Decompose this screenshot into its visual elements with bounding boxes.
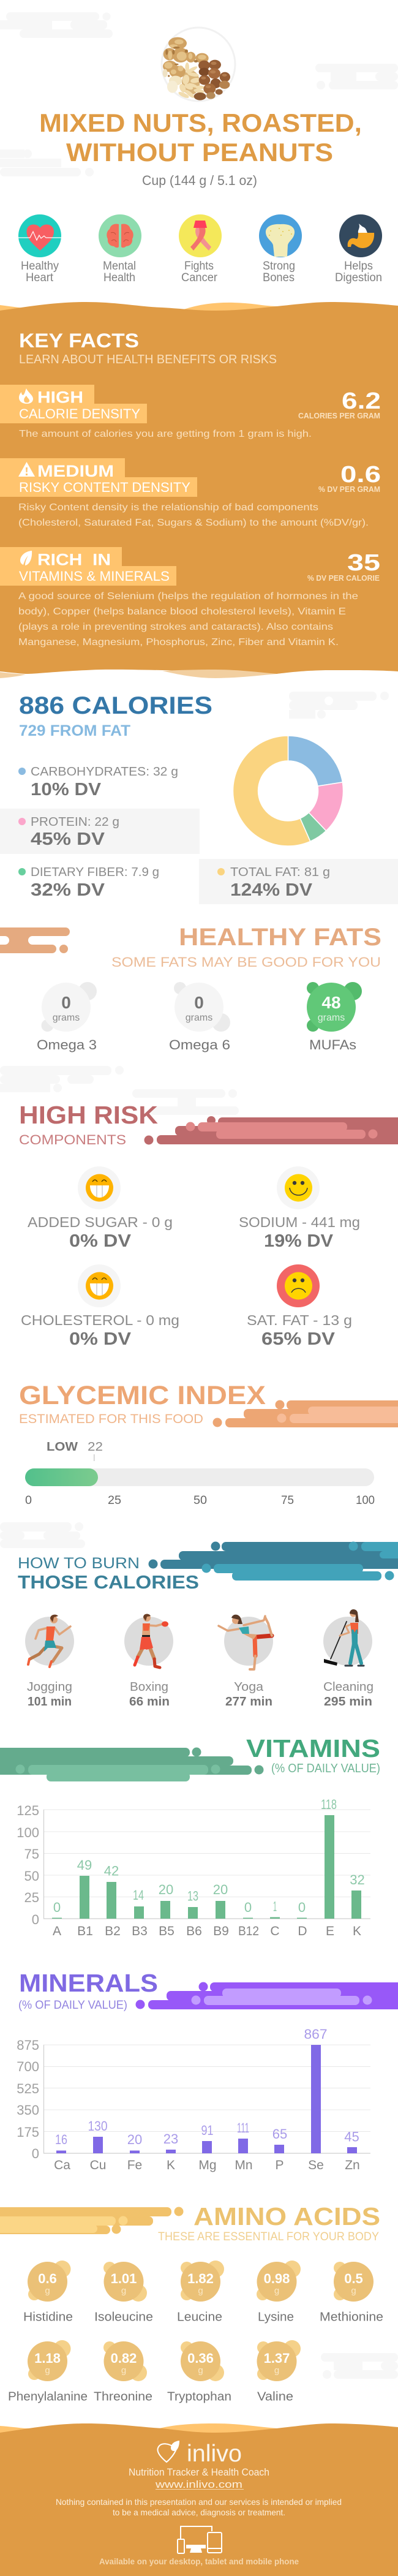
- activity: boxing: [124, 1614, 173, 1709]
- icon: devices: [178, 2526, 222, 2553]
- bar chart: minerals: 45: [344, 2129, 359, 2144]
- amino acid: leucine: g: [198, 2286, 203, 2296]
- heading: how to burn: THOSE CALORIES: [18, 1571, 199, 1593]
- bar chart: vitamins: 20: [213, 1882, 228, 1897]
- icon: fights cancer: Cancer: [181, 271, 218, 284]
- icon: flame: [19, 388, 33, 404]
- bar chart: minerals: 867: [304, 2026, 327, 2042]
- title: WITHOUT PEANUTS: [66, 138, 333, 167]
- amino acid: methionine: g: [351, 2286, 356, 2296]
- banner: amino acids: [0, 2207, 184, 2234]
- bar chart: vitamins: 1: [273, 1899, 277, 1914]
- fact: high calorie density: [0, 385, 381, 439]
- heading: calories: 729 FROM FAT: [19, 722, 130, 739]
- bar chart: minerals: 130: [88, 2118, 108, 2134]
- logo: inlivo: [157, 2441, 242, 2467]
- bar chart: vitamins: 20: [159, 1882, 173, 1897]
- fact: high calorie density: CALORIE DENSITY: [19, 406, 140, 421]
- banner: high risk: [145, 1116, 398, 1144]
- legend: dietary fiber: [18, 866, 159, 900]
- logo: inlivo: inlivo: [187, 2441, 242, 2467]
- bar chart: minerals: 23: [163, 2131, 178, 2147]
- bar chart: vitamins: E: [326, 1924, 334, 1938]
- fact: rich in vitamins and minerals: % DV PER CALORIE: [307, 574, 380, 583]
- bar chart: minerals: 0: [32, 2146, 39, 2161]
- amino acid: histidine: g: [45, 2286, 50, 2296]
- legend: dietary fiber: 32% DV: [31, 880, 105, 900]
- stat: MUFAs: MUFAs: [309, 1037, 356, 1052]
- risk: cholesterol: 0% DV: [69, 1329, 132, 1349]
- amino acid: valine: 1.37: [264, 2351, 290, 2366]
- amino acid: isoleucine: 1.01: [111, 2271, 137, 2286]
- amino acid: tryptophan: 0.36: [187, 2351, 214, 2366]
- amino acid: histidine: Histidine: [23, 2311, 73, 2324]
- bar chart: vitamins: B12: [238, 1924, 259, 1938]
- gauge: glycemic index: 22: [88, 1440, 103, 1454]
- bar chart: vitamins: 50: [24, 1868, 39, 1884]
- bar chart: minerals: Mg: [198, 2158, 217, 2172]
- bar chart: vitamins: B3: [132, 1924, 148, 1938]
- amino acid: lysine: Lysine: [258, 2311, 294, 2324]
- stat: MUFAs: grams: [318, 1013, 345, 1023]
- amino acid: lysine: 0.98: [264, 2271, 290, 2286]
- icon: strong bones: Strong: [263, 260, 295, 273]
- bar chart: minerals: 350: [17, 2102, 39, 2118]
- bar chart: vitamins: B5: [159, 1924, 175, 1938]
- footer: to be a medical advice, diagnosis or treatment.: [113, 2507, 285, 2517]
- heading: key facts: KEY FACTS: [19, 330, 139, 352]
- heading: calories: 886 CALORIES: [19, 692, 212, 719]
- bar chart: vitamins: 118: [321, 1797, 337, 1812]
- bar chart: vitamins: D: [298, 1924, 307, 1938]
- fact: rich in vitamins and minerals: [0, 547, 380, 648]
- bar chart: vitamins: 25: [24, 1890, 39, 1905]
- legend: protein: PROTEIN: 22 g: [31, 815, 119, 829]
- bar chart: vitamins: A: [53, 1924, 61, 1938]
- amino acid: tryptophan: Tryptophan: [167, 2390, 231, 2404]
- icon: heart and leaf: [157, 2441, 179, 2462]
- legend: total fat: [217, 866, 330, 900]
- icon: strong bones: [259, 214, 302, 284]
- bar chart: minerals: 16: [55, 2132, 67, 2147]
- amino acid: phenylalanine: [8, 2340, 88, 2404]
- risk: saturated fat: SAT. FAT - 13 g: [247, 1312, 352, 1328]
- bar chart: minerals: P: [275, 2158, 284, 2172]
- heading: minerals: [18, 1969, 158, 2012]
- activity: boxing: Boxing: [130, 1680, 168, 1694]
- heading: high risk: [19, 1101, 158, 1147]
- fact: high calorie density: CALORIES PER GRAM: [298, 412, 380, 420]
- bar chart: vitamins: B9: [213, 1924, 229, 1938]
- activity: jogging: [25, 1615, 74, 1709]
- footer: Available on your desktop, tablet and mobile phone: [99, 2556, 299, 2566]
- banner: burn calories: [148, 1541, 398, 1581]
- icon: helps digestion: Digestion: [335, 271, 382, 284]
- bar chart: minerals: 91: [201, 2123, 213, 2138]
- amino acid: methionine: [320, 2262, 383, 2324]
- serving size: Cup (144 g / 5.1 oz): [142, 173, 257, 188]
- fact: medium risky content density: Risky Content density is the relationship of bad components: [18, 502, 318, 513]
- stat: omega 6: [169, 982, 230, 1052]
- fact: medium risky content density: (Cholesterol, Saturated Fat, Sugars & Sodium) to the amount (%DV/gr).: [18, 518, 369, 528]
- bar chart: vitamins: [17, 1797, 370, 1938]
- icon: yoga figure: [219, 1615, 272, 1669]
- bar chart: minerals: 700: [17, 2059, 39, 2074]
- icon: helps digestion: [335, 214, 382, 284]
- bar chart: vitamins: C: [270, 1924, 280, 1938]
- amino acid: lysine: [257, 2261, 301, 2324]
- icon: leaf: [20, 551, 32, 565]
- icon: runner: [28, 1615, 70, 1667]
- legend: dietary fiber: DIETARY FIBER: 7.9 g: [31, 866, 159, 879]
- bar chart: vitamins: 0: [32, 1912, 39, 1927]
- bar chart: vitamins: 125: [17, 1803, 39, 1818]
- gauge: glycemic index: 0: [25, 1494, 32, 1507]
- bar chart: minerals: Ca: [54, 2158, 70, 2172]
- legend: protein: 45% DV: [31, 829, 105, 849]
- legend: carbohydrates: CARBOHYDRATES: 32 g: [31, 765, 178, 779]
- banner: glycemic index: [213, 1400, 398, 1427]
- heading: glycemic index: GLYCEMIC INDEX: [19, 1381, 266, 1410]
- icon: healthy heart: [18, 214, 61, 284]
- bar chart: vitamins: B1: [77, 1924, 93, 1938]
- activity: yoga: [219, 1615, 273, 1709]
- amino acid: isoleucine: [94, 2262, 153, 2324]
- amino acid: histidine: [23, 2261, 73, 2324]
- amino acid: tryptophan: g: [198, 2365, 203, 2376]
- title: [39, 108, 362, 167]
- heading: healthy fats: [111, 924, 381, 970]
- amino acid: leucine: 1.82: [187, 2271, 214, 2286]
- icon: strong bones: Bones: [263, 271, 295, 284]
- heading: high risk: COMPONENTS: [19, 1132, 126, 1147]
- footer: Nothing contained in this presentation and our services is intended or implied: [56, 2497, 342, 2507]
- gauge: glycemic index: 25: [108, 1494, 121, 1507]
- fact: medium risky content density: RISKY CONTENT DENSITY: [19, 480, 190, 495]
- amino acid: leucine: Leucine: [177, 2311, 222, 2324]
- bar chart: minerals: Zn: [345, 2158, 360, 2172]
- gauge: glycemic index: [25, 1440, 375, 1507]
- bar chart: vitamins: 0: [53, 1900, 61, 1915]
- fact: rich in vitamins and minerals: RICH IN: [37, 550, 111, 568]
- risk: cholesterol: CHOLESTEROL - 0 mg: [21, 1312, 179, 1328]
- risk: cholesterol: [21, 1264, 179, 1349]
- heading: amino acids: THESE ARE ESSENTIAL FOR YOUR BODY: [158, 2230, 379, 2243]
- heading: vitamins: VITAMINS: [246, 1734, 380, 1762]
- bar chart: minerals: Cu: [90, 2158, 106, 2172]
- bar chart: vitamins: 13: [187, 1888, 198, 1904]
- bar chart: minerals: 65: [272, 2126, 287, 2142]
- amino acid: histidine: 0.6: [38, 2271, 57, 2286]
- risk: added sugar: [28, 1166, 173, 1251]
- bar chart: minerals: 20: [127, 2132, 142, 2147]
- banner: vitamins: [0, 1747, 263, 1781]
- amino acid: lysine: g: [274, 2286, 279, 2296]
- bar chart: minerals: Fe: [127, 2158, 142, 2172]
- heading: how to burn: [18, 1555, 199, 1593]
- bar chart: vitamins: 100: [17, 1825, 39, 1840]
- bar chart: minerals: Se: [308, 2158, 324, 2172]
- heading: healthy fats: SOME FATS MAY BE GOOD FOR YOU: [111, 954, 381, 970]
- bar chart: vitamins: 0: [244, 1900, 252, 1915]
- stat: MUFAs: [307, 982, 362, 1052]
- activity: jogging: Jogging: [27, 1680, 72, 1694]
- fact: medium risky content density: % DV PER GRAM: [318, 485, 380, 494]
- heading: vitamins: [246, 1734, 380, 1775]
- amino acid: phenylalanine: g: [45, 2365, 50, 2376]
- bar chart: vitamins: 42: [104, 1864, 119, 1878]
- risk: saturated fat: [247, 1264, 352, 1349]
- fact: rich in vitamins and minerals: A good source of Selenium (helps the regulation of hormones in the: [18, 591, 358, 602]
- fact: high calorie density: 6.2: [342, 388, 381, 414]
- bar chart: minerals: 875: [17, 2038, 39, 2053]
- icon: grinning face: [86, 1174, 113, 1202]
- bar chart: minerals: [17, 2026, 370, 2172]
- risk: sodium: 19% DV: [264, 1231, 334, 1251]
- amino acid: threonine: g: [121, 2365, 126, 2376]
- bar chart: vitamins: B6: [186, 1924, 202, 1938]
- gauge: glycemic index: 50: [193, 1494, 207, 1507]
- amino acid: threonine: [94, 2341, 152, 2404]
- legend: carbohydrates: 10% DV: [31, 780, 102, 799]
- bar chart: minerals: Mn: [235, 2158, 253, 2172]
- activity: boxing: 66 min: [129, 1695, 170, 1709]
- stat: omega 6: Omega 6: [169, 1037, 230, 1052]
- heading: glycemic index: [19, 1381, 266, 1426]
- heading: high risk: HIGH RISK: [19, 1101, 158, 1129]
- fact: rich in vitamins and minerals: VITAMINS & MINERALS: [19, 568, 170, 584]
- amino acid: isoleucine: g: [121, 2286, 126, 2296]
- benefit icons row: [18, 214, 382, 284]
- icon: mental health: Mental: [103, 260, 136, 273]
- amino acid: methionine: Methionine: [320, 2311, 383, 2324]
- bar chart: vitamins: 49: [77, 1857, 92, 1873]
- icon: smiling face: [285, 1174, 312, 1202]
- stat: omega 3: Omega 3: [37, 1037, 97, 1052]
- activity: yoga: 277 min: [225, 1695, 272, 1709]
- amino acid: threonine: 0.82: [111, 2351, 137, 2366]
- legend: carbohydrates: [18, 765, 178, 799]
- panel: key facts: [0, 302, 398, 678]
- activity: cleaning: [323, 1609, 374, 1709]
- risk: sodium: SODIUM - 441 mg: [239, 1214, 360, 1230]
- gauge: glycemic index: LOW: [47, 1440, 78, 1454]
- icon: fights cancer: Fights: [184, 260, 214, 273]
- legend: total fat: TOTAL FAT: 81 g: [230, 866, 330, 879]
- bar chart: vitamins: 0: [298, 1900, 306, 1915]
- gauge: glycemic index: 75: [281, 1494, 294, 1507]
- icon: grinning face: [86, 1272, 113, 1300]
- risk: added sugar: 0% DV: [69, 1231, 132, 1251]
- panel: total fat background: [199, 859, 398, 904]
- amino acid: leucine: [177, 2261, 224, 2324]
- fact: rich in vitamins and minerals: 35: [347, 550, 380, 576]
- amino acid: isoleucine: Isoleucine: [94, 2311, 153, 2324]
- activity: cleaning: Cleaning: [323, 1680, 374, 1694]
- panel: protein background: [0, 809, 200, 854]
- bar chart: vitamins: 32: [350, 1872, 365, 1887]
- stat: MUFAs: 48: [321, 993, 341, 1012]
- gauge: glycemic index: 100: [356, 1494, 375, 1507]
- heading: glycemic index: ESTIMATED FOR THIS FOOD: [19, 1412, 203, 1426]
- fact: high calorie density: The amount of calories you are getting from 1 gram is high.: [19, 429, 312, 439]
- fact: medium risky content density: MEDIUM: [37, 462, 114, 480]
- risk: added sugar: ADDED SUGAR - 0 g: [28, 1214, 173, 1230]
- heading: amino acids: AMINO ACIDS: [193, 2202, 380, 2230]
- icon: person sweeping: [324, 1609, 364, 1666]
- footer: Nutrition Tracker & Health Coach: [129, 2466, 269, 2478]
- bar chart: vitamins: B2: [105, 1924, 121, 1938]
- stat: omega 6: 0: [194, 993, 204, 1012]
- fact: medium risky content density: [0, 458, 381, 528]
- amino acid: methionine: 0.5: [344, 2271, 363, 2286]
- activity: jogging: 101 min: [28, 1695, 72, 1709]
- icon: fights cancer: [179, 214, 222, 284]
- amino acid: valine: Valine: [257, 2390, 293, 2404]
- footer: [0, 2423, 398, 2576]
- risk: sodium: [239, 1166, 360, 1251]
- fact: high calorie density: HIGH: [37, 388, 83, 407]
- bar chart: minerals: 525: [17, 2081, 39, 2096]
- legend: protein: [18, 815, 119, 849]
- heading: healthy fats: HEALTHY FATS: [179, 924, 381, 951]
- risk: saturated fat: 65% DV: [261, 1329, 336, 1349]
- activity: cleaning: 295 min: [324, 1695, 372, 1709]
- icon: sad face: [285, 1272, 312, 1300]
- fact: rich in vitamins and minerals: Manganese, Magnesium, Phosphorus, Zinc, Fiber and Vitamin K.: [18, 637, 339, 648]
- icon: healthy heart: Healthy: [21, 260, 59, 273]
- amino acid: threonine: Threonine: [94, 2390, 152, 2404]
- stat: omega 3: 0: [61, 993, 71, 1012]
- amino acid: phenylalanine: 1.18: [34, 2351, 61, 2366]
- heading: key facts: [19, 330, 277, 366]
- heading: amino acids: [158, 2202, 380, 2243]
- fact: rich in vitamins and minerals: body), Copper (helps balance blood cholesterol levels), Vitamin E: [18, 606, 346, 617]
- bar chart: vitamins: 75: [24, 1846, 39, 1862]
- icon: mental health: Health: [103, 271, 135, 284]
- heading: how to burn: HOW TO BURN: [18, 1555, 140, 1572]
- heading: minerals: MINERALS: [19, 1969, 158, 1997]
- donut chart: [233, 736, 344, 846]
- heading: vitamins: (% OF DAILY VALUE): [271, 1762, 380, 1775]
- amino acid: phenylalanine: Phenylalanine: [8, 2390, 88, 2404]
- footer: www.inlivo.com: [155, 2479, 242, 2490]
- stat: omega 3: [37, 982, 97, 1052]
- bar chart: minerals: K: [167, 2158, 175, 2172]
- stat: omega 3: grams: [53, 1013, 80, 1023]
- icon: helps digestion: Helps: [344, 260, 373, 273]
- food photo: mixed nuts: [162, 28, 235, 101]
- activity: yoga: Yoga: [234, 1680, 264, 1694]
- bar chart: vitamins: K: [353, 1924, 361, 1938]
- fact: medium risky content density: 0.6: [340, 462, 381, 488]
- heading: key facts: LEARN ABOUT HEALTH BENEFITS OR RISKS: [19, 353, 277, 366]
- title: MIXED NUTS, ROASTED,: [39, 108, 362, 137]
- amino acid: valine: [257, 2340, 301, 2404]
- stat: omega 6: grams: [186, 1013, 212, 1023]
- heading: minerals: (% OF DAILY VALUE): [18, 1999, 127, 2012]
- icon: healthy heart: Heart: [26, 271, 54, 284]
- icon: boxer: [135, 1614, 168, 1668]
- icon: warning triangle: [18, 462, 35, 477]
- banner: healthy fats: [0, 927, 70, 953]
- legend: total fat: 124% DV: [230, 880, 313, 900]
- icon: mental health: [99, 214, 141, 284]
- heading: calories: [19, 692, 212, 739]
- amino acid: valine: g: [274, 2365, 279, 2376]
- bar chart: minerals: 111: [237, 2120, 249, 2136]
- bar chart: vitamins: 14: [133, 1887, 144, 1903]
- bar chart: minerals: 175: [17, 2125, 39, 2140]
- amino acid: tryptophan: [167, 2341, 231, 2404]
- banner: minerals: [136, 1982, 398, 2009]
- fact: rich in vitamins and minerals: (plays a role in preventing strokes and cataracts). Also contains: [18, 622, 333, 632]
